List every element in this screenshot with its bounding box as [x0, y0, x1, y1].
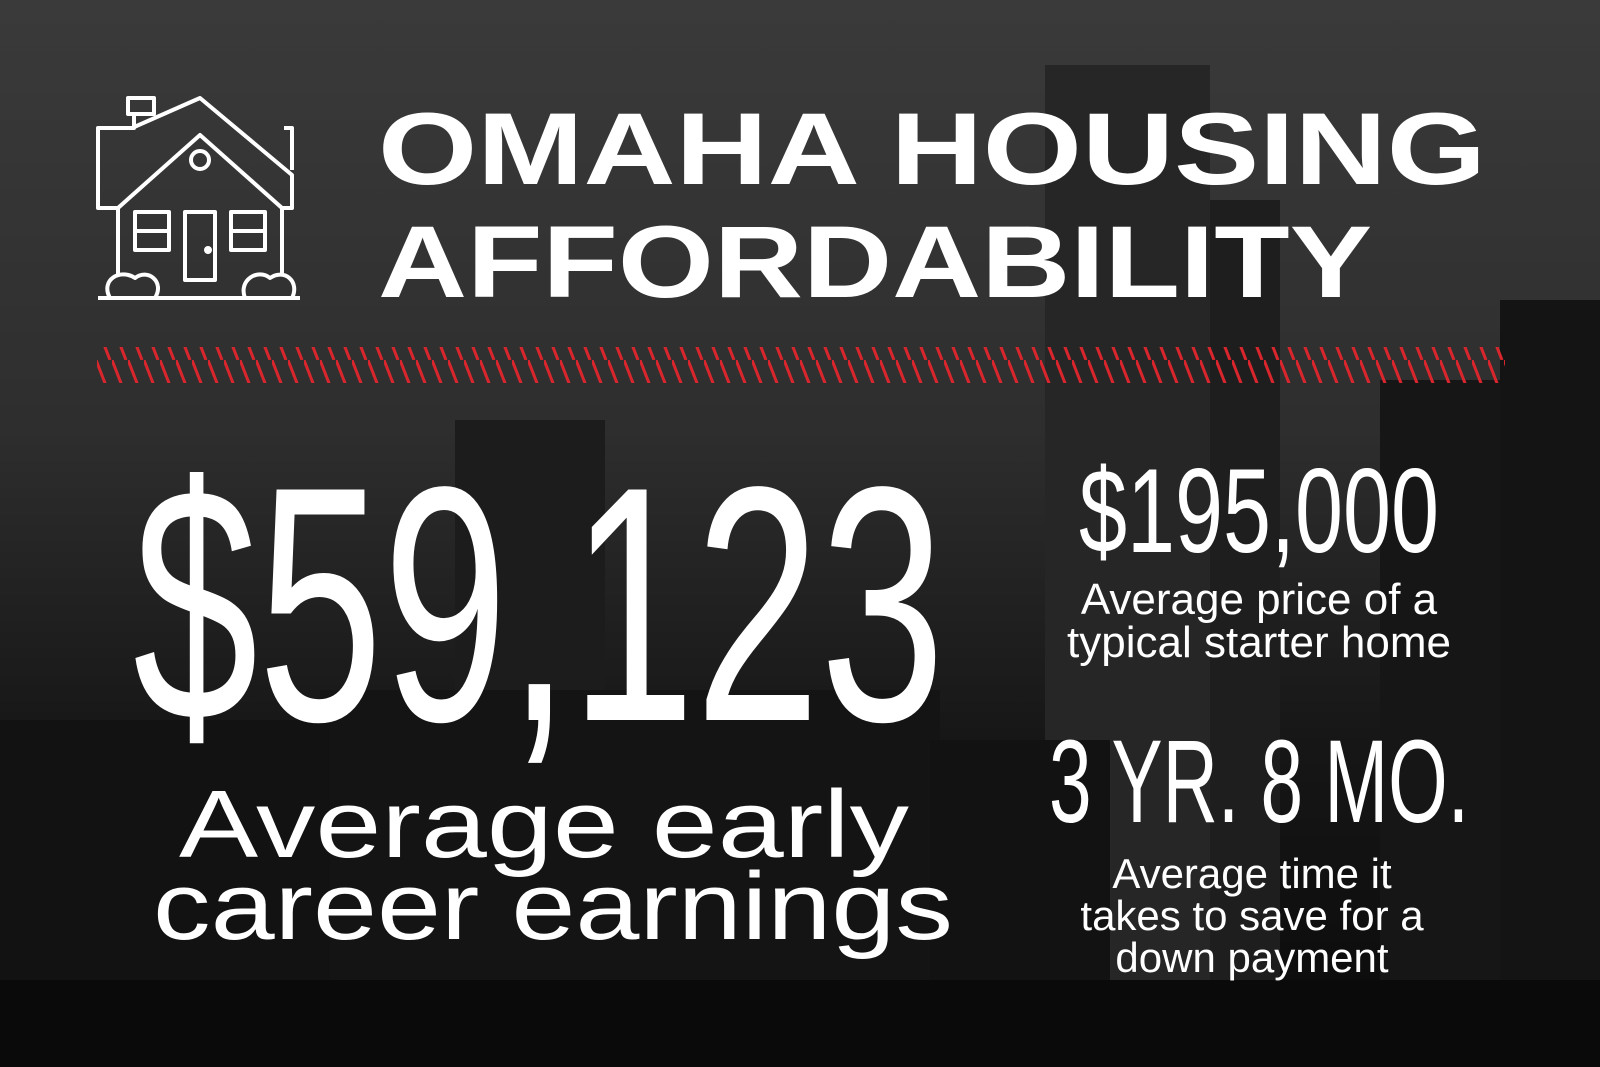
- stat: starter home price: [1067, 444, 1451, 667]
- icon: house: [98, 98, 300, 298]
- stat: starter home price: $195,000: [1079, 444, 1439, 578]
- title: [378, 92, 1486, 319]
- stat: early career earnings: [133, 417, 953, 960]
- stat: down payment time: [1049, 716, 1469, 981]
- stat: early career earnings: $59,123: [133, 417, 945, 791]
- stat: down payment time: Average time it: [1112, 850, 1392, 897]
- stat: starter home price: Average price of a: [1081, 575, 1438, 624]
- stat: early career earnings: Average early: [179, 771, 909, 878]
- title: OMAHA HOUSING: [378, 92, 1486, 206]
- stat: starter home price: typical starter home: [1067, 618, 1451, 667]
- title: AFFORDABILITY: [378, 205, 1372, 319]
- stat: down payment time: takes to save for a: [1080, 892, 1424, 939]
- stat: down payment time: down payment: [1115, 934, 1389, 981]
- red hatch divider: [97, 347, 1505, 383]
- stat: early career earnings: career earnings: [153, 853, 953, 960]
